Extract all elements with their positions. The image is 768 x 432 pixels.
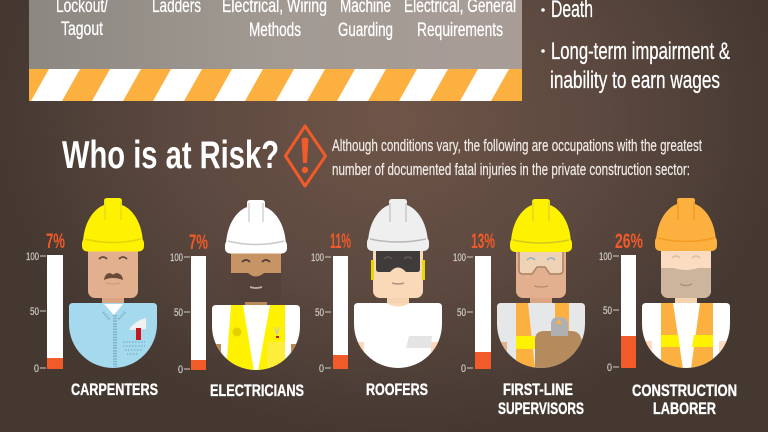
bar chart: roofers 11%: 100 — [311, 252, 324, 264]
worker: first-line supervisor — [497, 199, 587, 369]
bar chart: electricians 7% — [170, 231, 208, 376]
label: tagout: Tagout — [61, 19, 104, 40]
bar chart: first-line supervisors 13% — [453, 230, 495, 375]
bullet list: consequences — [541, 0, 730, 94]
label: construction laborer: LABORER — [653, 399, 716, 418]
heading: Who is at Risk? — [62, 134, 279, 177]
icon: warning diamond — [286, 126, 326, 186]
bar chart: first-line supervisors 13%: 0 — [461, 363, 466, 375]
bar chart: electricians 7%: 0 — [178, 364, 183, 376]
bar chart: carpenters 7%: 100 — [26, 251, 39, 263]
bar chart: construction laborer 26%: 26% — [615, 230, 643, 253]
bar chart: electricians 7%: 7% — [189, 231, 208, 254]
bar chart: electricians 7%: 50 — [174, 307, 183, 319]
worker: electrician — [212, 200, 300, 371]
label: construction laborer: CONSTRUCTION — [632, 381, 737, 400]
bar chart: construction laborer 26%: 100 — [599, 251, 612, 263]
bar chart: electricians 7%: 100 — [170, 252, 183, 264]
bar chart: roofers 11% — [311, 230, 351, 375]
label: roofers: ROOFERS — [366, 380, 428, 399]
worker: roofer — [354, 199, 442, 369]
bar chart: construction laborer 26%: 0 — [607, 362, 612, 374]
panel: violations list — [29, 0, 522, 69]
bar chart: first-line supervisors 13%: 50 — [457, 307, 466, 319]
bar chart: roofers 11%: 11% — [330, 230, 351, 253]
label: first-line supervisors: FIRST-LINE — [503, 380, 573, 399]
label: requirements: Requirements — [417, 20, 503, 41]
bar chart: carpenters 7% — [26, 230, 65, 375]
bar chart: first-line supervisors 13%: 100 — [453, 252, 466, 264]
bar chart: roofers 11%: 50 — [315, 307, 324, 319]
bar chart: roofers 11%: 0 — [319, 363, 324, 375]
label: construction laborer — [632, 381, 737, 418]
label: guarding: Guarding — [338, 20, 393, 41]
label: methods: Methods — [249, 20, 301, 41]
worker: construction laborer — [642, 198, 730, 369]
bar chart: construction laborer 26%: 50 — [603, 305, 612, 317]
label: carpenters: CARPENTERS — [71, 380, 158, 399]
bar chart: construction laborer 26% — [599, 230, 643, 374]
bar chart: first-line supervisors 13%: 13% — [471, 230, 495, 253]
label: electricians: ELECTRICIANS — [210, 381, 304, 400]
label: first-line supervisors: SUPERVISORS — [498, 399, 584, 418]
label: first-line supervisors — [498, 380, 584, 418]
worker: carpenter — [69, 198, 157, 368]
hazard stripe — [29, 69, 522, 101]
bar chart: carpenters 7%: 0 — [34, 363, 39, 375]
bar chart: carpenters 7%: 7% — [46, 230, 65, 253]
intro text — [332, 137, 702, 179]
bar chart: carpenters 7%: 50 — [30, 306, 39, 318]
